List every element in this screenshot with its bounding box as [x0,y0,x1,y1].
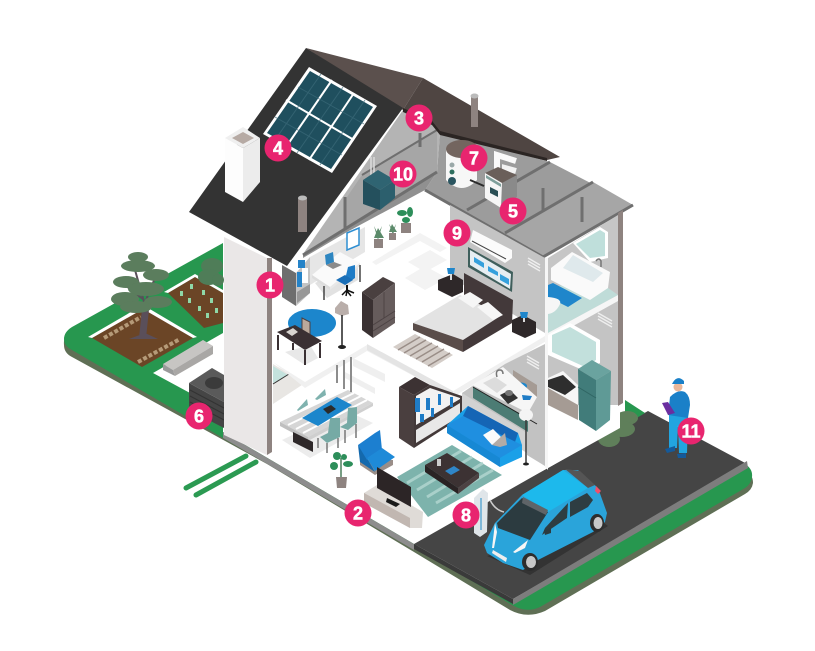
worktop [548,371,578,405]
office back wall [310,227,365,285]
wall vent [598,313,612,327]
bath mat [548,283,582,307]
tap [596,259,601,267]
technician with clipboard [662,378,690,458]
laptop [325,252,342,269]
left outer wall [224,237,272,455]
badge 6: 6 [194,406,204,426]
boiler and flue [485,155,517,208]
bathroom floor slab [548,295,618,340]
blue round rug [288,309,336,337]
badge 4: 4 [273,138,283,158]
badge 7 [460,144,488,172]
vegetable bed [164,274,223,328]
coffee table [425,453,479,494]
badge 11 [678,418,704,444]
teal living room rug [397,445,502,517]
upper stairs [372,233,447,290]
ground base [64,243,753,615]
badge 7: 7 [469,148,479,168]
badge 5 [500,198,526,224]
blue stools [515,382,527,390]
soil bed with stepping stones [88,305,197,367]
middle floor slab [273,336,548,397]
wheels [522,514,604,571]
white floors [272,190,620,541]
office chair [336,265,355,296]
badge 3 [406,104,432,132]
living room floor lamp [519,409,533,466]
solar panels [263,67,377,173]
plants on landing [374,207,413,248]
back chairs [297,389,326,411]
hedge [598,400,645,447]
rear spoiler [565,469,595,488]
badge 6 [186,402,212,430]
hob [548,375,576,395]
fridge [578,360,611,431]
pendant lights [337,357,351,392]
left nightstand [438,268,463,297]
body [484,470,607,570]
utensils [522,395,532,400]
air conditioner [470,230,512,263]
hob [500,390,518,404]
floor [548,403,618,468]
badge 9 [444,220,470,246]
hot water tank [446,140,484,188]
badge 9: 9 [452,224,462,244]
bedroom floor lamp [335,301,349,349]
floor plant [330,452,353,488]
garden [88,252,224,415]
partition edge [545,258,548,470]
mirror [544,528,551,535]
bathroom window [573,227,608,262]
attic back wall [303,110,440,254]
wardrobe [362,277,395,338]
ground floor back wall left [273,364,305,404]
kitchen wall [548,301,618,405]
right outer wall stripe [618,210,623,406]
house interior [272,110,633,541]
partition and back wall [462,344,545,466]
number badges [186,104,704,528]
floor shadow [282,410,373,458]
badge 1: 1 [265,276,275,296]
cabinets [548,388,578,420]
headlights [492,523,497,548]
roof vents [298,94,478,232]
windshield [497,498,548,540]
roof panel [522,470,588,512]
counter top [472,367,537,413]
roof [189,48,560,266]
bed with nightstands [413,268,536,352]
lower stairs [345,358,385,394]
badge 10 [390,160,416,188]
attic beam underside [303,172,437,258]
attic battery [363,157,395,210]
office shelving [282,257,310,306]
tree [111,252,172,339]
badge 8 [452,502,480,528]
legs [669,415,688,453]
bathtub [551,252,610,300]
attic floor [425,133,633,257]
small table and chair [277,318,322,365]
badge 2 [344,500,372,526]
wall picture [347,228,359,250]
bedroom wall vent [528,258,540,271]
toilet [548,297,560,314]
bathroom [548,215,618,340]
badge 1 [256,272,284,298]
electric car [484,469,608,575]
bed base [413,295,502,340]
number plate [492,550,507,562]
counter front [473,387,528,432]
shadow [487,520,608,575]
kitchen island and living wall [462,344,545,466]
wall vent [527,356,539,369]
headboard [464,273,513,323]
chimney [225,127,260,202]
side windows [542,503,568,535]
striped bedroom rug [393,334,453,368]
office desk [312,252,360,300]
badge 5: 5 [508,202,518,222]
right nightstand [512,312,536,338]
ev charger [474,489,504,537]
blue armchair [358,430,395,475]
patio [153,333,223,415]
torso [668,391,690,418]
pillows [458,292,483,308]
badge 4 [264,134,292,162]
back bush [198,258,224,286]
kitchen window [548,323,600,371]
bathroom wall [548,215,618,333]
badge 3: 3 [414,108,424,128]
badge 10: 10 [393,164,413,184]
roof left slope [189,48,403,266]
bathroom floor [548,275,618,333]
underground pipes [186,456,256,495]
badge 8: 8 [461,506,471,526]
bench [163,340,213,376]
asphalt driveway [414,411,748,605]
front chairs [320,407,357,443]
head and cap [674,382,682,392]
kitchen room [545,210,623,470]
dining table [280,389,373,458]
clipboard [662,402,675,415]
sink [483,377,507,393]
badge 11: 11 [681,422,701,442]
bookcase [399,377,462,448]
bedroom back wall [450,205,545,333]
blue sofa [447,406,522,467]
attic beams [303,130,633,257]
wall painting [468,247,513,292]
tv and stand [364,467,423,528]
badge 2: 2 [353,504,363,524]
beige wall panel [513,370,537,397]
heat pump unit [189,368,224,428]
tail light [595,486,601,494]
roof right slope [306,48,423,110]
